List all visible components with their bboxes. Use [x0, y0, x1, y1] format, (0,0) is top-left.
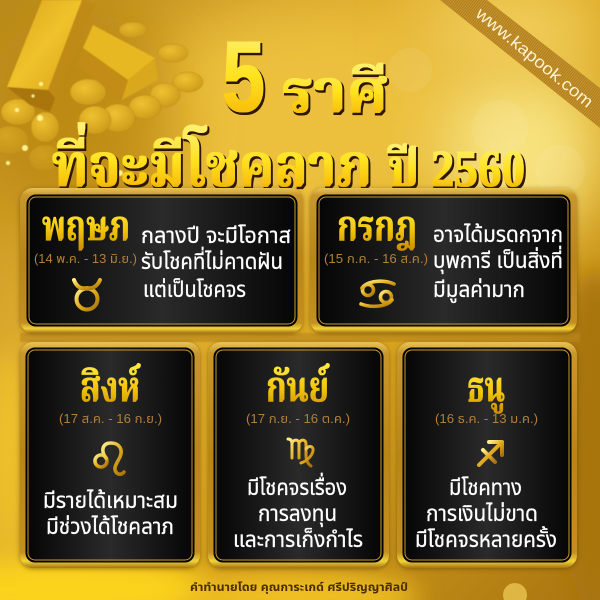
description [141, 223, 291, 302]
gold bar one [7, 0, 95, 112]
sparkles [6, 82, 123, 176]
description: มีมูลค่ามาก [433, 277, 525, 303]
description [433, 222, 563, 303]
description: มีช่วงได้โชคลาภ [46, 514, 174, 539]
description: การลงทุน [258, 501, 337, 527]
description: มีรายได้เหมาะสม [43, 488, 178, 513]
icon: sagittarius [479, 442, 502, 465]
description: กลางปี จะมีโอกาส [141, 223, 291, 248]
dates: (17 ส.ค. - 16 ก.ย.) [59, 412, 162, 426]
dates: (14 พ.ค. - 13 มิ.ย.) [34, 252, 137, 266]
description: การเงินไม่ขาด [426, 501, 538, 526]
heading: พฤษภ [42, 204, 130, 251]
panel: ธนู [397, 342, 577, 568]
heading: สิงห์ [80, 361, 141, 411]
title: ราศี [282, 59, 388, 125]
footer credit: คำทำนายโดย คุณการะเกด์ ศรีปริญญาศิลป์ [190, 580, 408, 594]
ribbon: www.kapook.com [440, 0, 600, 128]
dates: (17 ก.ย. - 16 ต.ค.) [246, 412, 350, 426]
description [233, 472, 363, 552]
title: ที่จะมีโชคลาภ [52, 122, 372, 199]
title [52, 21, 525, 199]
icon: leo [95, 443, 124, 474]
description [43, 488, 178, 539]
heading: กรกฎ [337, 204, 417, 251]
illustration: gold bars and coins [0, 0, 203, 176]
description: แต่เป็นโชคจร [143, 277, 246, 302]
description: รับโชคที่ไม่คาดฝัน [141, 246, 283, 274]
description: มีโชคจรเรื่อง [247, 472, 347, 500]
panel: กรกฎ [310, 188, 577, 333]
description: และการเก็งกำไร [233, 527, 363, 552]
heading: ธนู [467, 365, 505, 414]
icon: cancer [361, 281, 394, 306]
description [415, 475, 557, 552]
icon: virgo [288, 439, 313, 466]
gold bar two [78, 25, 158, 100]
description: มีโชคจรหลายครั้ง [415, 525, 557, 552]
panel: พฤษภ [20, 188, 303, 333]
description: อาจได้มรดกจาก [433, 222, 563, 247]
coins [0, 22, 203, 171]
icon: taurus [74, 280, 100, 310]
panel: สิงห์ [20, 342, 200, 568]
dates: (16 ธ.ค. - 13 ม.ค.) [435, 412, 538, 426]
description: มีโชคทาง [449, 475, 522, 500]
dates: (15 ก.ค. - 16 ส.ค.) [324, 252, 428, 266]
title: ปี 2560 [387, 141, 525, 198]
heading: กันย์ [266, 361, 330, 411]
title: 5 [222, 21, 265, 133]
ribbon: www.kapook.com: www.kapook.com [471, 3, 597, 112]
description: บุพการี เป็นสิ่งที่ [433, 245, 563, 274]
panel: กันย์ [208, 342, 389, 568]
